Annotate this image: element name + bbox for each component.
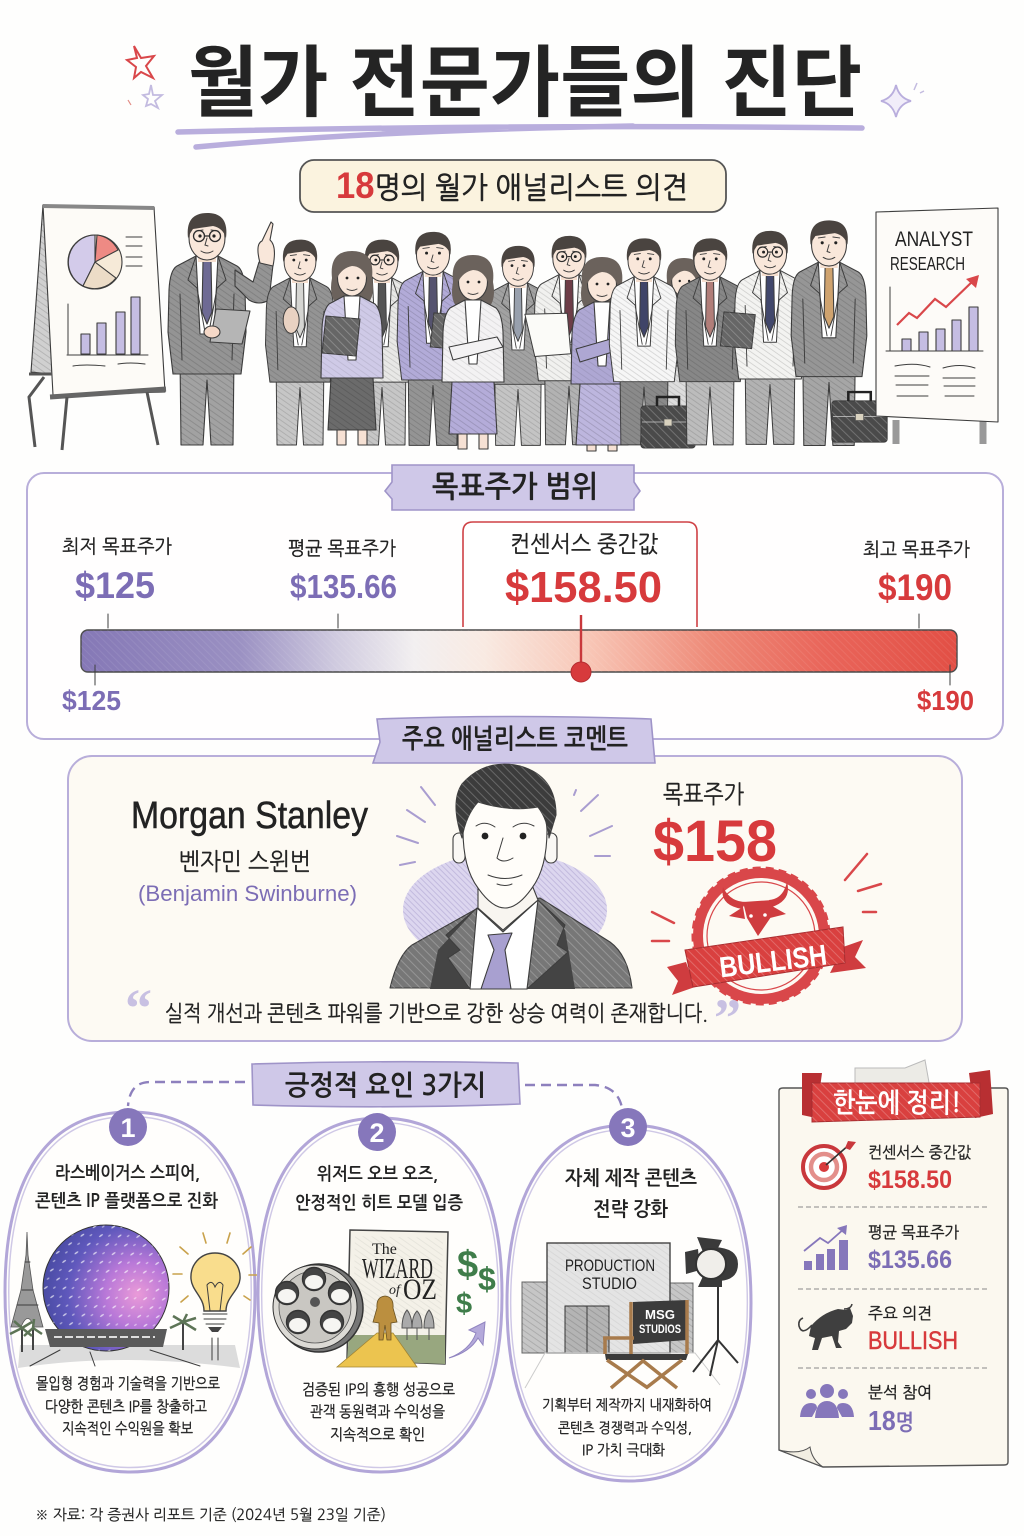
- row: average: $135.66: [868, 1246, 952, 1274]
- heading: three positive factors: 긍정적 요인 3가지: [285, 1071, 486, 1100]
- research board: RESEARCH: [890, 254, 965, 274]
- portrait: [390, 764, 632, 989]
- row: participants: 18명: [868, 1405, 914, 1436]
- factor 3 body: [542, 1397, 712, 1458]
- high target: $190: [878, 567, 952, 608]
- quote: [125, 978, 741, 1048]
- heading: key analyst comment: [373, 716, 655, 763]
- panel: summary card: [779, 1060, 1008, 1467]
- studio light: [685, 1237, 738, 1376]
- low target: 최저 목표주가: [62, 537, 172, 556]
- target price: 목표주가: [663, 782, 744, 807]
- analyst: gray suit: [484, 246, 552, 445]
- dollar signs: $: [457, 1244, 478, 1286]
- analyst identity: 벤자민 스윈번: [179, 850, 311, 874]
- panel: factor 1: [5, 1108, 257, 1472]
- range bar: $190: [917, 685, 974, 716]
- high target: [863, 540, 970, 608]
- analyst: woman behind: [658, 258, 710, 423]
- factor 2 body: [302, 1381, 455, 1443]
- director chair: MSG: [645, 1307, 675, 1322]
- low target: $125: [75, 565, 155, 606]
- factor 3 body: 콘텐츠 경쟁력과 수익성,: [558, 1420, 692, 1436]
- number badge 3: [609, 1108, 647, 1146]
- subtitle box: [300, 160, 726, 212]
- icon: briefcase 1: [641, 397, 695, 448]
- banner: [667, 940, 866, 995]
- growth arrow: [449, 1322, 485, 1358]
- illustration: wizard of oz book: $: [456, 1288, 472, 1320]
- curled corner: [779, 1447, 823, 1467]
- consensus median callout: $158.50: [505, 563, 662, 612]
- row: average: [804, 1224, 959, 1274]
- title text: 월가 전문가들의 진단: [188, 21, 862, 133]
- analyst: gray suit tan tie: [791, 220, 867, 446]
- factor 2 body: 검증된 IP의 흥행 성공으로: [302, 1381, 455, 1398]
- analyst: white shirt navy tie: [609, 238, 679, 445]
- eiffel tower: [11, 1232, 43, 1327]
- icon: people: [800, 1384, 854, 1418]
- factor 3 body: IP 가치 극대화: [582, 1443, 665, 1458]
- panel: target price range: [27, 465, 1003, 739]
- heading: target price range: 목표주가 범위: [432, 471, 598, 502]
- research board: ANALYST: [895, 228, 973, 251]
- icon: bull: [799, 1304, 853, 1350]
- heading: key analyst comment: 주요 애널리스트 코멘트: [402, 725, 628, 753]
- icon: bull head: [722, 882, 788, 936]
- quote: 실적 개선과 콘텐츠 파워를 기반으로 강한 상승 여력이 존재합니다.: [165, 1002, 708, 1025]
- panel: factor 2: [258, 1113, 502, 1472]
- tape: [855, 1060, 930, 1088]
- director chair: [603, 1300, 688, 1388]
- palms: [22, 1322, 183, 1352]
- analyst identity: [131, 795, 368, 906]
- analyst: light suit behind: [347, 240, 417, 445]
- source footnote: ※ 자료: 각 증권사 리포트 기준 (2024년 5월 23일 기준): [35, 1507, 386, 1523]
- illustration: wizard of oz book: WIZARD: [362, 1254, 433, 1285]
- raised arm: [235, 262, 273, 303]
- illustration: studio: [522, 1237, 738, 1388]
- heading: target price range: [385, 465, 640, 510]
- analyst: white jacket with document: [525, 236, 604, 445]
- factor 1 heading: [35, 1163, 218, 1210]
- illustration: wizard of oz book: [273, 1230, 496, 1367]
- row: consensus: 컨센서스 중간값: [868, 1144, 971, 1161]
- analyst: woman lilac jacket: [571, 257, 633, 451]
- analyst identity: Morgan Stanley: [131, 795, 368, 837]
- analyst: woman with tablet: [321, 251, 383, 445]
- panel: factor 3: [507, 1108, 751, 1481]
- icon: briefcase 2: [832, 392, 887, 442]
- row: participants: [800, 1384, 932, 1436]
- low target: [62, 537, 172, 606]
- title brush underline: [178, 126, 862, 147]
- average target: [288, 539, 397, 605]
- row: average: 평균 목표주가: [868, 1224, 959, 1241]
- number badge 3: 3: [620, 1113, 636, 1143]
- decorative sparkle: [881, 85, 911, 117]
- row: opinion: [799, 1304, 958, 1355]
- factor 2 heading: [295, 1164, 463, 1212]
- film reel: [273, 1264, 363, 1352]
- analyst: woman arms crossed: [442, 255, 504, 449]
- decorative star: red: [127, 46, 154, 78]
- factor 1 heading: 콘텐츠 IP 플랫폼으로 진화: [35, 1191, 218, 1210]
- row: opinion: BULLISH: [868, 1327, 958, 1355]
- quote: ”: [714, 988, 741, 1048]
- average target: $135.66: [290, 568, 397, 605]
- number badge 2: [358, 1113, 396, 1151]
- illustration: studio: STUDIO: [582, 1274, 637, 1293]
- row: opinion: 주요 의견: [868, 1305, 932, 1322]
- quote: “: [125, 978, 152, 1038]
- analyst: gray suit pink tie: [675, 238, 745, 445]
- row: consensus: $158.50: [868, 1166, 952, 1194]
- analyst identity: (Benjamin Swinburne): [138, 881, 357, 906]
- flip chart with pie and bars: [29, 205, 166, 450]
- average target: 평균 목표주가: [288, 539, 396, 558]
- illustration: wizard of oz book: of: [389, 1283, 402, 1298]
- range bar: $125: [62, 685, 121, 716]
- illustration: wizard of oz book: The: [372, 1241, 397, 1258]
- factor 3 heading: 전략 강화: [593, 1199, 668, 1219]
- bullish stamp: [652, 854, 881, 1004]
- research board: [876, 208, 998, 444]
- high target: 최고 목표주가: [863, 540, 970, 559]
- illustration: wizard of oz book: $: [478, 1261, 496, 1297]
- factor 1 body: [36, 1375, 220, 1437]
- illustration: wizard of oz book: OZ: [403, 1273, 437, 1306]
- presenter analyst: [168, 213, 274, 445]
- red ribbon: [802, 1070, 993, 1122]
- subtitle text: 18명의 월가 애널리스트 의견: [336, 165, 688, 206]
- factor 1 heading: 라스베이거스 스피어,: [55, 1163, 200, 1182]
- consensus median callout: 컨센서스 중간값: [510, 533, 658, 556]
- bullish stamp: BULLISH: [718, 940, 829, 984]
- analyst: white jacket tablet: [720, 231, 806, 444]
- range bar: [62, 614, 974, 716]
- number badge 1: [109, 1108, 147, 1146]
- factor 2 heading: 안정적인 히트 모델 입증: [295, 1193, 463, 1212]
- target price: [653, 782, 777, 874]
- factor 3 heading: 자체 제작 콘텐츠: [565, 1168, 697, 1188]
- factor 2 heading: 위저드 오브 오즈,: [317, 1164, 438, 1183]
- icon: light bulb: [173, 1233, 257, 1360]
- analyst: lilac jacket: [397, 232, 469, 445]
- analyst: gray suit clapping: [265, 240, 335, 445]
- panel: analyst comment: [68, 716, 962, 1048]
- icon: target: [803, 1141, 856, 1188]
- title: [127, 21, 924, 147]
- decorative star: lavender: [143, 85, 162, 108]
- factor 3 heading: [565, 1168, 697, 1219]
- factor 2 body: 관객 동원력과 수익성을: [310, 1404, 445, 1420]
- illustration: studio: PRODUCTION: [565, 1256, 655, 1275]
- factor 3 body: 기획부터 제작까지 내재화하여: [542, 1397, 712, 1413]
- icon: bar chart arrow: [804, 1225, 848, 1270]
- row: participants: 분석 참여: [868, 1384, 932, 1401]
- factor 1 body: 다양한 콘텐츠 IP를 창출하고: [45, 1398, 207, 1415]
- heading: three positive factors: [128, 1062, 622, 1108]
- number badge 2: 2: [369, 1118, 385, 1148]
- factor 1 body: 지속적인 수익원을 확보: [62, 1421, 193, 1437]
- illustration: sphere: [10, 1225, 240, 1368]
- director chair: STUDIOS: [639, 1322, 681, 1336]
- factor 2 body: 지속적으로 확인: [330, 1427, 425, 1443]
- red ribbon: 한눈에 정리!: [833, 1089, 961, 1117]
- consensus median callout: [463, 522, 697, 627]
- target price: $158: [653, 809, 777, 874]
- factor 1 body: 몰입형 경험과 기술력을 기반으로: [36, 1375, 220, 1392]
- number badge 1: 1: [120, 1113, 136, 1143]
- row: consensus: [803, 1141, 971, 1194]
- illustration: analysts group: [29, 205, 998, 451]
